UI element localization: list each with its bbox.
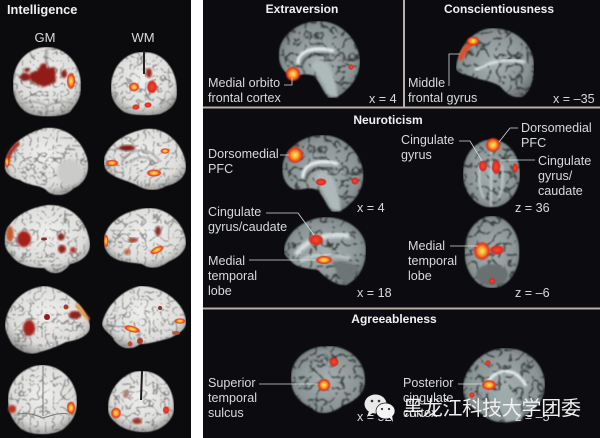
label: cingulate gyrus [401,133,482,162]
label: posterior cingulate cortex: Posterior [403,376,453,390]
brain: GM lateral row 2 [4,128,88,195]
column label: WM: WM [131,30,155,45]
label: cingulate gyrus: Cingulate [401,133,454,147]
label: superior temporal sulcus: Superior [208,376,256,390]
panel: background black left [0,0,191,438]
panel: agreeableness [208,312,550,424]
label: medial temporal lobe left: lobe [208,284,232,298]
label: cingulate gyrus caudate: caudate [538,184,583,198]
heading: Agreeableness: Agreeableness [351,312,437,326]
coordinate: z = 36 [515,201,550,215]
brain: WM lateral row 2 [104,129,186,190]
brain: GM front row 1 [13,47,81,116]
label: posterior cingulate cortex: cingulate [403,391,453,405]
label: cingulate gyrus: gyrus [401,148,432,162]
MRI brain: neuroticism axial z=36 [463,137,520,208]
coordinate: x = 4 [369,92,397,106]
panel: intelligence [4,2,186,434]
MRI brain: conscientiousness [456,28,534,97]
MRI brain: neuroticism axial z=-6 [464,216,520,288]
brain: WM back row 5 [108,371,174,432]
label: cingulate gyrus caudate: Cingulate [538,154,591,168]
label: medial temporal lobe left: Medial [208,254,245,268]
column label: GM: GM [35,30,55,45]
label: superior temporal sulcus: sulcus [208,406,244,420]
label: dorsomedial PFC right: PFC [521,136,546,150]
brain: GM lateral row 4 [5,286,90,354]
icon: wechat bubbles [364,394,395,422]
label: medial temporal lobe right: lobe [408,269,432,283]
label: cingulate gyrus/caudate: gyrus/caudate [208,220,287,234]
brain: WM lateral row 4 [102,286,186,348]
coordinate: x = 18 [357,286,392,300]
label: middle frontal gyrus: Middle [408,76,445,90]
brain: GM back row 5 [8,365,77,434]
panel: conscientiousness [408,2,595,106]
label: middle frontal gyrus [408,54,477,105]
MRI brain: extraversion [279,21,360,98]
label: medial temporal lobe right: temporal [408,254,457,268]
label: medial temporal lobe right: Medial [408,239,445,253]
brain: GM lateral row 3 [5,205,90,273]
panel dividers [203,0,600,310]
label: medial temporal lobe left [208,254,316,298]
label: medial orbito frontal cortex: Medial orbito [208,76,280,90]
coordinate: x = 4 [357,201,385,215]
watermark text: 黑龙江科技大学团委 [403,392,581,421]
coordinate: x = –35 [553,92,595,106]
label: middle frontal gyrus: frontal gyrus [408,91,477,105]
panel: neuroticism [208,113,592,300]
label: cingulate gyrus/caudate [208,205,314,235]
label: medial temporal lobe left: temporal [208,269,257,283]
label: posterior cingulate cortex: cortex [403,406,438,420]
label: dorsomedial PFC right: Dorsomedial [521,121,592,135]
coordinate: z = –6 [515,286,550,300]
label: dorsomedial PFC left [208,147,289,176]
heading: Intelligence: Intelligence [7,2,77,17]
label: dorsomedial PFC right [499,121,592,150]
label: medial orbito frontal cortex: frontal cortex [208,91,281,105]
brain: WM lateral row 3 [104,208,186,268]
MRI brain: agreeableness sagittal [463,348,545,422]
coordinate: z = –5 [515,410,550,424]
label: medial temporal lobe right [408,239,478,283]
label: cingulate gyrus caudate: gyrus/ [538,169,573,183]
heading: Conscientiousness: Conscientiousness [444,2,554,16]
MRI brain: agreeableness coronal [291,346,365,413]
label: superior temporal sulcus: temporal [208,391,257,405]
panel: background black right [203,0,600,438]
label: superior temporal sulcus [208,376,318,420]
label: dorsomedial PFC left: Dorsomedial [208,147,279,161]
label: cingulate gyrus caudate [500,154,591,198]
heading: Neuroticism: Neuroticism [353,113,423,127]
label: dorsomedial PFC left: PFC [208,162,233,176]
MRI brain: neuroticism sagittal x=18 [284,217,366,285]
label: medial orbito frontal cortex [208,76,292,105]
label: cingulate gyrus/caudate: Cingulate [208,205,261,219]
heading: Extraversion: Extraversion [266,2,338,16]
MRI brain: neuroticism sagittal x=4 [282,135,364,212]
coordinate: x = 52 [357,410,392,424]
brain: WM front row 1 [111,51,177,115]
panel: extraversion [208,2,397,106]
label: posterior cingulate cortex [403,376,482,420]
